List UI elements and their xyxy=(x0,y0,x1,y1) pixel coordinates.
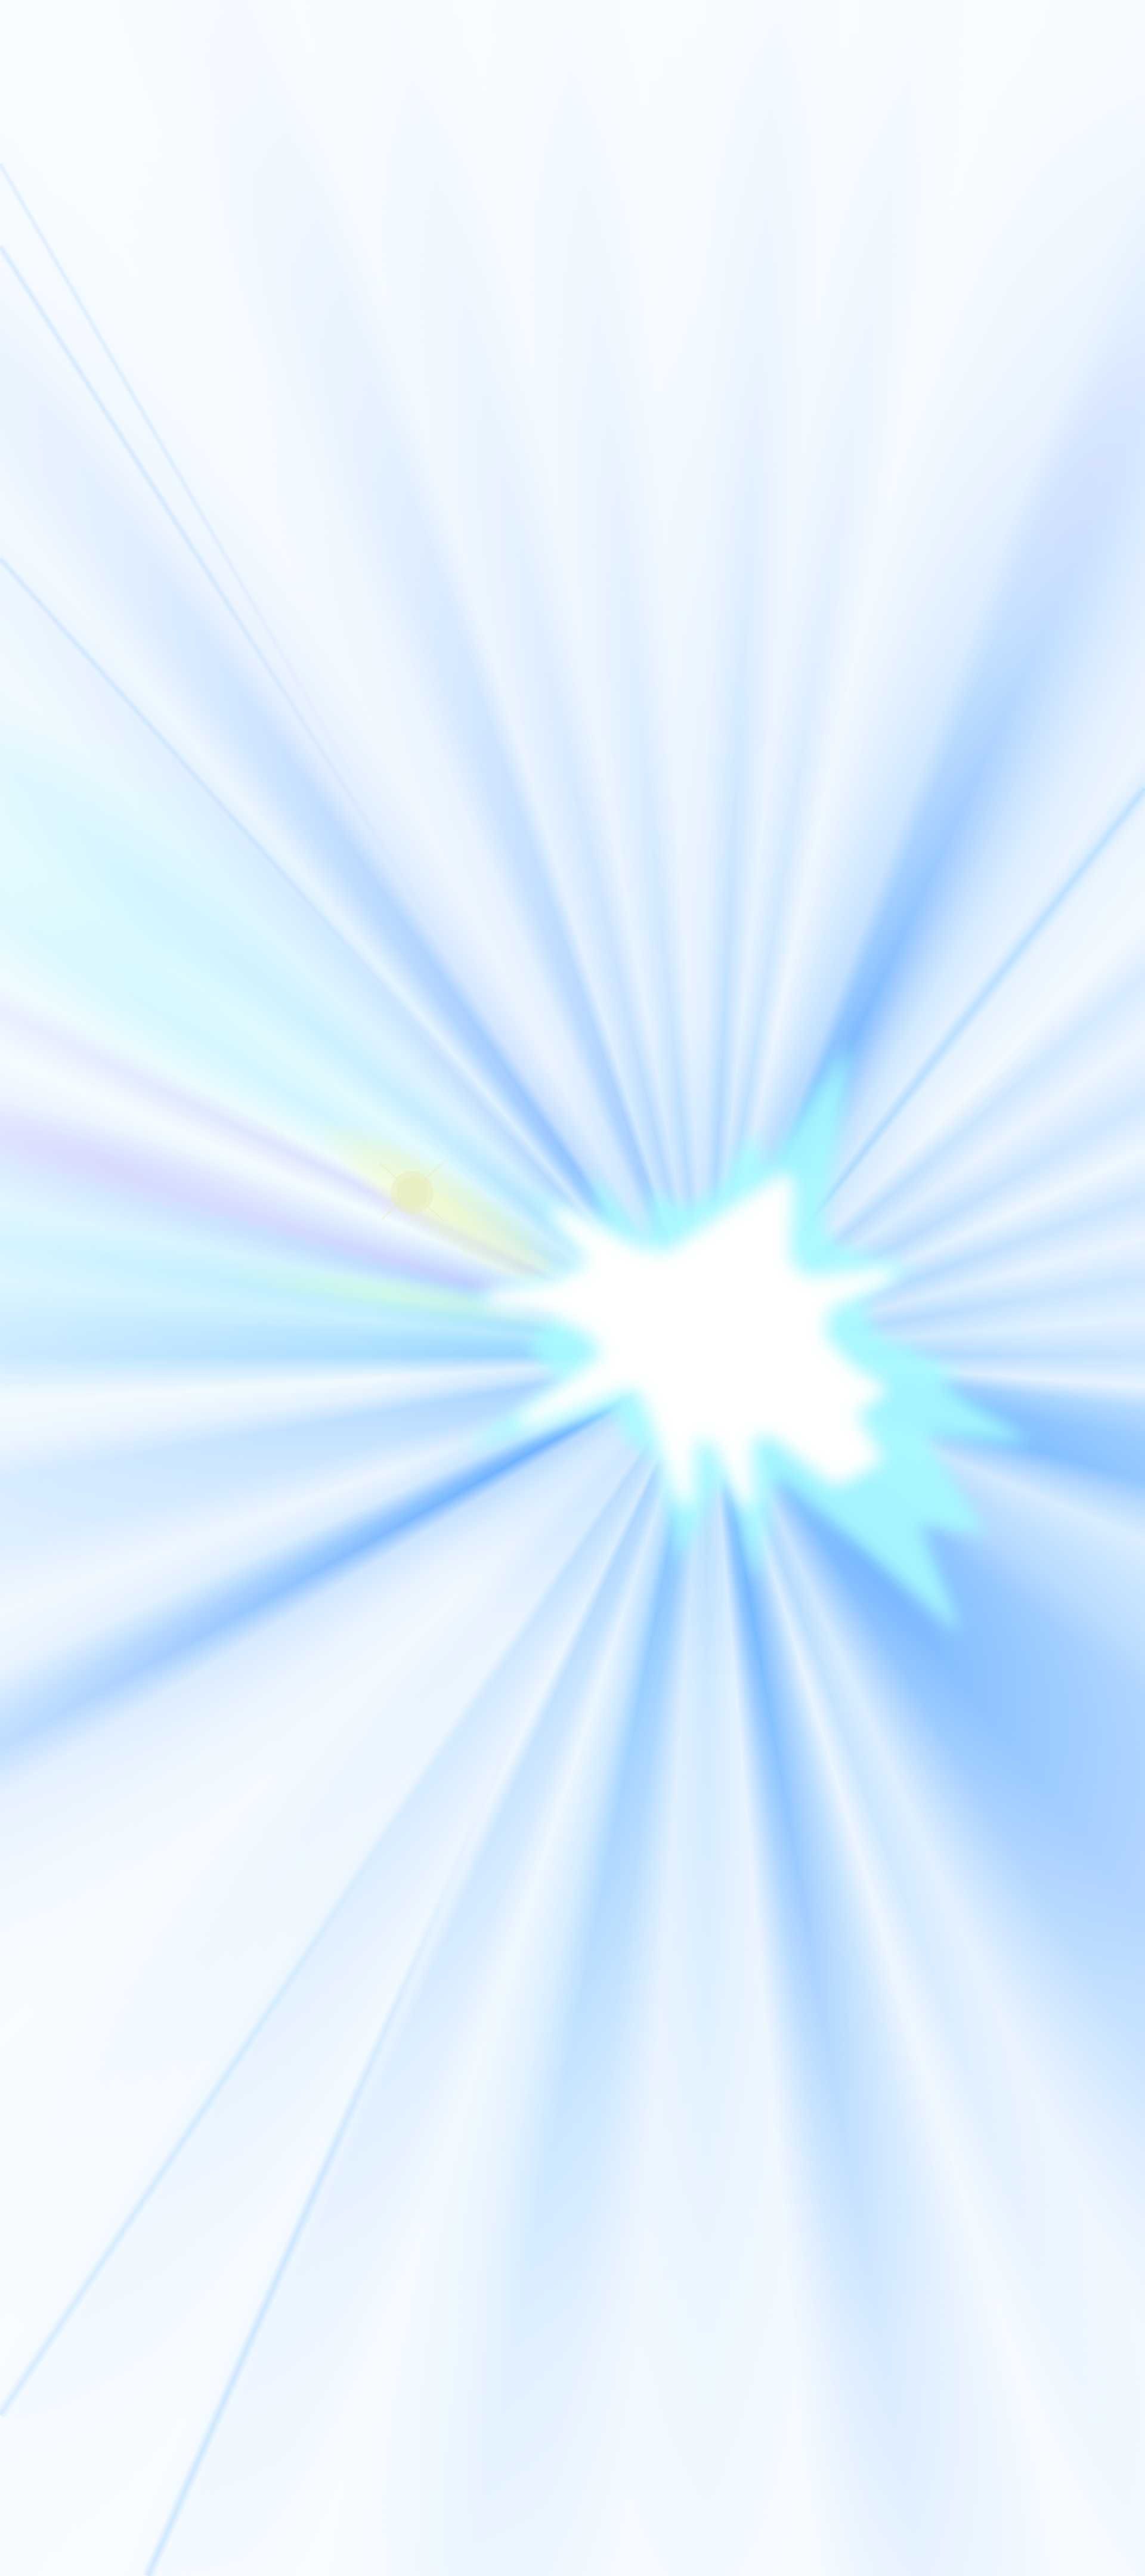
yellow streak xyxy=(298,1093,597,1322)
flare star lines xyxy=(379,1160,446,1221)
left cyan veil xyxy=(0,615,507,1245)
central burst: cyan halo xyxy=(470,1048,1027,1633)
green streak xyxy=(202,1248,621,1347)
central glow halo xyxy=(373,1021,1041,1689)
thin ray lower-left 1 xyxy=(143,1818,478,2576)
central burst: white core xyxy=(478,1165,900,1515)
thin ray upper-left 2 xyxy=(0,244,357,805)
thin ray upper-left 3 xyxy=(0,557,404,1010)
flare glow xyxy=(391,1171,434,1214)
lavender streak left xyxy=(0,1068,308,1248)
thin ray right xyxy=(964,786,1145,1021)
lens flare spot xyxy=(379,1160,446,1221)
thin ray lower-left 2 xyxy=(0,1807,406,2417)
lavender glow upper right xyxy=(945,278,1145,707)
thin ray upper-left 1 xyxy=(0,163,295,677)
